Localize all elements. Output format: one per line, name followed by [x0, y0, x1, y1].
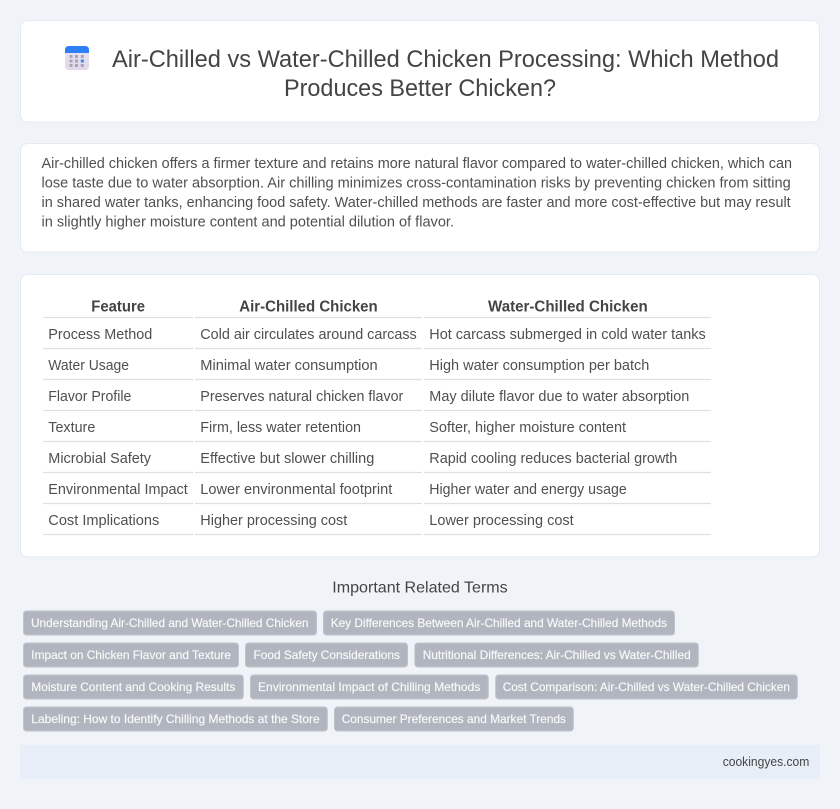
row: cost implications: [43, 513, 711, 534]
tag: understanding: Understanding Air-Chilled and Water-Chilled Chicken: [31, 616, 308, 630]
row: process method: [43, 327, 711, 348]
row: water usage: [43, 358, 711, 380]
summary text: in shared water tanks, enhancing food safety. Water-chilled methods are faster and more cost-effective but may result: [42, 195, 791, 211]
row: texture: [43, 420, 711, 442]
tag: nutritional differences: [415, 643, 698, 667]
title text: Produces Better Chicken?: [284, 75, 556, 102]
tag: environmental impact: [250, 675, 488, 699]
row: cost implications: Cost Implications: [48, 513, 159, 529]
footer: [20, 745, 820, 779]
row: microbial safety: Effective but slower chilling: [200, 451, 374, 467]
tag: food safety: [246, 643, 408, 667]
row: flavor profile: [43, 389, 711, 410]
summary text: Air-chilled chicken offers a firmer texture and retains more natural flavor compared to water-chilled chicken, which can: [42, 156, 792, 172]
table header: Feature: [91, 299, 145, 316]
row: flavor profile: Flavor Profile: [48, 389, 131, 405]
tag list: related terms: [24, 611, 797, 731]
panel: comparison table: [20, 274, 820, 557]
row: water usage: High water consumption per batch: [429, 358, 649, 374]
tag: cost comparison: Cost Comparison: Air-Chilled vs Water-Chilled Chicken: [503, 680, 790, 694]
heading: important related terms: Important Related Terms: [332, 580, 508, 597]
row: environmental impact: Higher water and energy usage: [429, 482, 627, 498]
tag: cost comparison: [496, 675, 797, 699]
tag: key differences: Key Differences Between Air-Chilled and Water-Chilled Methods: [331, 616, 667, 630]
table header: Air-Chilled Chicken: [239, 299, 378, 316]
tag: flavor and texture: Impact on Chicken Flavor and Texture: [31, 648, 231, 662]
row: texture: Firm, less water retention: [200, 420, 361, 436]
row: process method: Hot carcass submerged in cold water tanks: [429, 327, 706, 343]
row: microbial safety: [43, 451, 711, 472]
panel: title: [20, 20, 820, 122]
row: cost implications: Higher processing cost: [200, 513, 347, 529]
title text: [112, 46, 779, 102]
tag: food safety: Food Safety Considerations: [254, 648, 400, 662]
row: flavor profile: Preserves natural chicken flavor: [200, 389, 403, 405]
footer: cookingyes.com: [723, 754, 809, 769]
row: texture: Softer, higher moisture content: [429, 420, 626, 436]
summary text: [42, 156, 792, 230]
title text: Air-Chilled vs Water-Chilled Chicken Processing: Which Method: [112, 46, 779, 73]
tag: consumer preferences: [334, 707, 573, 731]
row: microbial safety: Rapid cooling reduces bacterial growth: [429, 451, 677, 467]
summary text: in slightly higher moisture content and potential dilution of flavor.: [42, 214, 454, 230]
row: process method: Process Method: [48, 327, 152, 343]
icon: calendar: [65, 46, 89, 70]
tag: key differences: [324, 611, 674, 635]
row: environmental impact: Lower environmental footprint: [200, 482, 392, 498]
tag: understanding: [24, 611, 316, 635]
tag: moisture content: Moisture Content and Cooking Results: [31, 680, 235, 694]
summary text: lose taste due to water absorption. Air chilling minimizes cross-contamination risks by preventing chicken from sitting: [42, 176, 791, 192]
row: microbial safety: Microbial Safety: [48, 451, 152, 467]
row: water usage: Minimal water consumption: [200, 358, 378, 374]
tag: labeling: [24, 707, 327, 731]
row: environmental impact: [43, 482, 711, 504]
row: process method: Cold air circulates around carcass: [200, 327, 417, 343]
row: environmental impact: Environmental Impact: [48, 482, 188, 498]
table header: Water-Chilled Chicken: [488, 299, 648, 316]
row: texture: Texture: [48, 420, 95, 436]
tag: environmental impact: Environmental Impact of Chilling Methods: [258, 680, 480, 694]
tag: flavor and texture: [24, 643, 238, 667]
tag: nutritional differences: Nutritional Differences: Air-Chilled vs Water-Chilled: [423, 648, 691, 662]
panel: summary paragraph: [20, 144, 820, 252]
table header: [43, 299, 711, 318]
tag: moisture content: [24, 675, 243, 699]
tag: labeling: Labeling: How to Identify Chilling Methods at the Store: [31, 712, 320, 726]
row: water usage: Water Usage: [48, 358, 129, 374]
tag: consumer preferences: Consumer Preferences and Market Trends: [342, 712, 566, 726]
row: flavor profile: May dilute flavor due to water absorption: [429, 389, 689, 405]
row: cost implications: Lower processing cost: [429, 513, 574, 529]
